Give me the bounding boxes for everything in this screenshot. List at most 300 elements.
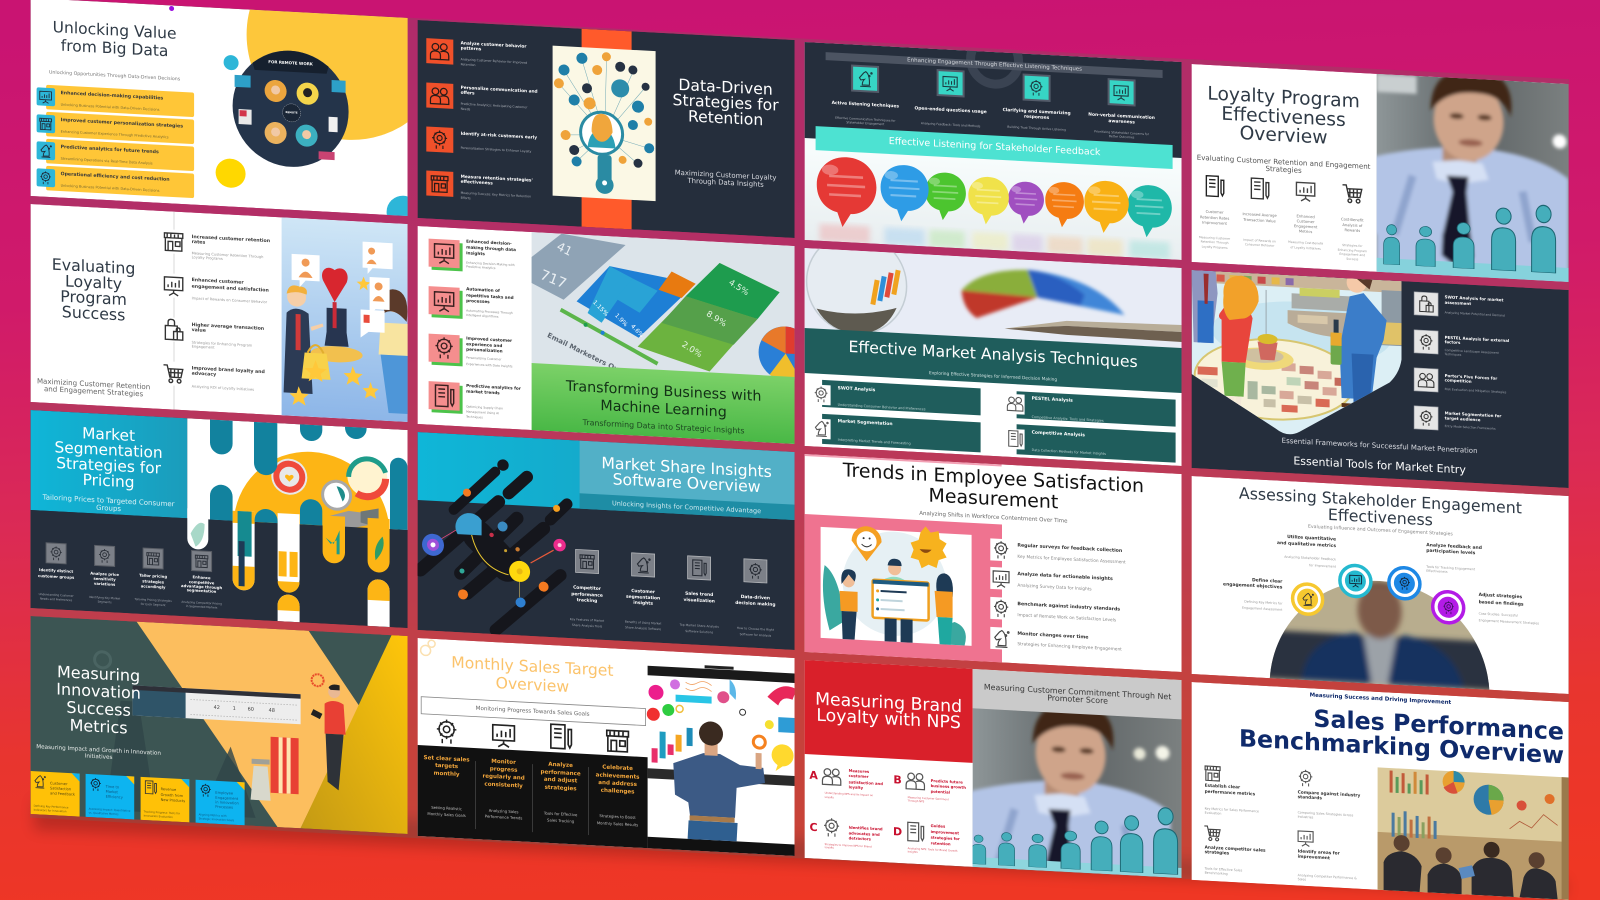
title: Unlocking Value xyxy=(53,18,177,43)
elephant-like yellow illustration xyxy=(31,410,408,628)
slide: Unlocking Value from Big Data xyxy=(30,0,408,216)
four software features: Share Analysis Software xyxy=(625,625,661,631)
A B C D benefits: strategies for xyxy=(931,834,960,841)
four metric cards: Processes xyxy=(215,805,233,810)
list of four capabilities xyxy=(37,84,194,198)
four engagement labels: Effectiveness xyxy=(1426,569,1448,574)
photo: team reviewing charts xyxy=(1378,767,1569,900)
four metric cards: Revenue xyxy=(161,787,177,792)
four survey practices: Analyze data for actionable insights xyxy=(1017,571,1113,582)
four pricing steps: for Each Segment xyxy=(141,602,166,607)
four technique bars: Competitive Analysis: Tools and Strategies xyxy=(1032,415,1104,423)
title: Strategies for xyxy=(673,91,779,115)
timeline of four outcomes: advocacy xyxy=(192,370,216,377)
grey subtitle band: Measuring Customer Commitment Through Net xyxy=(984,682,1171,701)
title: Segmentation xyxy=(54,438,163,462)
four ML benefits: Automation of xyxy=(466,286,500,293)
four pricing steps: accordingly xyxy=(141,583,166,589)
slide: Evaluating Loyalty Program Success xyxy=(31,204,409,422)
four benchmarking steps: Comparing Sales Strategies Across xyxy=(1298,810,1354,817)
four benchmarking steps: Analyzing Competitor Performance & xyxy=(1298,873,1357,880)
four survey practices: Benchmark against industry standards xyxy=(1017,601,1120,613)
A B C D benefits: Measuring Customer Sentiment xyxy=(908,795,949,801)
grey subtitle band xyxy=(973,669,1182,719)
four metrics: Metrics xyxy=(1299,229,1312,234)
four ML benefits: market trends xyxy=(466,388,500,395)
green title band: Transforming Business with xyxy=(565,379,761,405)
pink panel with team illustration xyxy=(805,514,1002,662)
A B C D benefits: business growth xyxy=(931,782,966,789)
four metric cards: Defining Key Performance xyxy=(34,804,69,810)
four ML benefits: Optimizing Supply Chain xyxy=(466,405,503,411)
four metrics: Improvement xyxy=(1202,221,1228,226)
four metrics: Increased Average xyxy=(1242,212,1277,218)
four market frameworks: Entry Mode Selection Frameworks xyxy=(1445,424,1496,431)
four ML benefits: Improved customer xyxy=(466,335,513,343)
four ML benefits: Predictive analytics for xyxy=(466,382,522,390)
four metric cards: Assessing Impact: Quantitative xyxy=(89,807,131,813)
four benchmarking steps: Analyze competitor sales xyxy=(1205,844,1266,853)
four retention steps: patterns xyxy=(461,45,482,52)
four listening techniques: Building Trust Through Active Listening xyxy=(1007,125,1066,132)
four benchmarking steps: Sales xyxy=(1298,877,1306,882)
slide: Effective Market Analysis Techniques xyxy=(805,231,1182,466)
black goals panel: monthly xyxy=(434,771,460,778)
four engagement labels: based on findings xyxy=(1479,599,1524,607)
subtitle: Maximizing Customer Loyalty xyxy=(675,169,776,182)
four engagement labels: and qualitative metrics xyxy=(1277,540,1336,549)
dashboard photo: 1.9% xyxy=(613,312,629,328)
four listening techniques: Analyzing Feedback: Tools and Methods xyxy=(921,121,981,128)
four market frameworks: SWOT Analysis for market xyxy=(1445,294,1503,302)
four metrics: Strategies for xyxy=(1342,243,1363,248)
pie chart and crystal ball photo xyxy=(804,248,1182,348)
four market frameworks: Competitive Landscape Assessment xyxy=(1445,348,1500,355)
four engagement labels: Engagement Measurement Strategies xyxy=(1479,618,1539,625)
four market frameworks: target audience xyxy=(1445,415,1481,422)
four listening techniques: awareness xyxy=(1108,118,1135,125)
four listening techniques: Prioritizing Stakeholder Concerns for xyxy=(1094,129,1150,136)
four metric cards: Strategic Innovation Goals xyxy=(199,816,235,822)
four benchmarking steps: improvement xyxy=(1298,853,1330,861)
title band xyxy=(805,328,1182,393)
four survey practices: Strategies for Enhancing Employee Engagement xyxy=(1017,641,1122,653)
soft shadow under collage xyxy=(34,800,1566,896)
photo: man with figures xyxy=(925,694,1182,878)
four retention steps xyxy=(426,38,538,204)
reflections xyxy=(820,224,1170,259)
slide: Trends in Employee Satisfaction Measurement xyxy=(805,454,1182,672)
four metrics: Success xyxy=(1346,257,1359,261)
four metric cards: Customer xyxy=(50,781,68,786)
subtitle: Initiatives xyxy=(85,754,113,761)
black goals panel: Tools for Effective xyxy=(543,810,578,817)
four metrics: Engagement xyxy=(1294,224,1318,229)
timeline of four outcomes: value xyxy=(192,327,206,333)
four pricing steps: customer groups xyxy=(38,572,75,579)
photo: man at whiteboard xyxy=(647,662,795,856)
black goals panel: progress xyxy=(490,766,518,774)
four pricing steps: strategies xyxy=(142,578,165,584)
four listening techniques xyxy=(832,64,1155,141)
timeline of four outcomes: Improved brand loyalty and xyxy=(192,365,265,375)
circular remote-work image xyxy=(233,48,349,170)
person with tablet xyxy=(311,674,346,791)
four pricing steps: Identify distinct xyxy=(39,567,73,573)
list of four capabilities: Streamlining Operations via Real-Time Data Analysis xyxy=(61,157,153,165)
four pricing steps: Analyze price xyxy=(90,570,119,577)
subtitle: Evaluating Influence and Outcomes of Engagement Strategies xyxy=(1308,524,1453,537)
four metrics xyxy=(1199,175,1367,262)
four software features: Data-driven xyxy=(741,593,770,601)
four ML benefits: personalization xyxy=(466,346,503,353)
four survey practices: Regular surveys for feedback collection xyxy=(1017,542,1122,554)
four metric cards: Efficiency xyxy=(106,795,124,800)
header band xyxy=(826,52,1163,78)
four ML benefits: Experiences with Data Insights xyxy=(466,362,513,368)
title box: Market Share Insights xyxy=(601,453,772,481)
four software features: Benefits of Using Market xyxy=(625,620,662,626)
green title band xyxy=(532,363,795,444)
four metric cards: Engagement xyxy=(215,796,239,801)
four software features: Top Market Share Analysis xyxy=(679,623,719,629)
title: Loyalty Program xyxy=(1207,83,1360,112)
slide: Sales Performance Benchmarking Overview xyxy=(1192,682,1569,900)
four retention steps: offers xyxy=(461,89,475,96)
logo rings xyxy=(421,640,435,656)
black goals panel: Monthly Sales Goals xyxy=(427,811,466,818)
dashboard photo: 717 xyxy=(538,267,568,292)
dashboard photo: 4.6% xyxy=(629,323,645,339)
black goals panel: Performance Trends xyxy=(485,813,522,820)
four metrics: Analysis of xyxy=(1342,223,1363,228)
four pricing steps: segmentation xyxy=(187,587,217,593)
dashboard photo: Email Marketers Ov xyxy=(546,331,620,374)
black goals panel: strategies xyxy=(545,785,577,792)
timeline of four outcomes xyxy=(162,229,270,393)
subtitle: Maximizing Customer Retention xyxy=(37,376,150,391)
four survey practices xyxy=(990,538,1126,656)
subtitle box xyxy=(421,697,646,726)
four metric cards: Employee xyxy=(215,791,234,796)
slide: Market Segmentation Strategies for Pricing xyxy=(31,410,408,628)
A B C D benefits: Measures xyxy=(849,767,870,774)
black goals panel: achievements xyxy=(596,772,640,781)
four software features: tracking xyxy=(577,597,597,604)
black goals panel: challenges xyxy=(601,788,635,796)
subtitle box: Monitoring Progress Towards Sales Goals xyxy=(476,706,590,718)
subtitle: Measuring Impact and Growth in Innovation xyxy=(36,744,161,757)
four metrics: Measuring Cost-Benefit xyxy=(1288,240,1324,246)
subtitle: Unlocking Insights for Competitive Advantage xyxy=(612,499,761,515)
four technique bars: PESTEL Analysis xyxy=(1032,396,1073,404)
four engagement labels: for Improvement xyxy=(1309,563,1337,569)
four survey practices: Monitor changes over time xyxy=(1017,631,1088,641)
four engagement labels: engagement objectives xyxy=(1223,581,1283,590)
four metrics: Cost-Benefit xyxy=(1341,217,1364,223)
four pricing steps: Tailoring Pricing Strategies xyxy=(134,597,172,603)
four software features: performance xyxy=(571,591,603,598)
four benchmarking steps: Identify areas for xyxy=(1298,848,1341,856)
four software features: Key Features of Market xyxy=(570,617,605,623)
slide: Data-Driven Strategies for Retention xyxy=(418,20,795,238)
network of dark pills xyxy=(420,455,567,634)
four software features: insights xyxy=(633,599,653,606)
title: Monthly Sales Target xyxy=(451,653,613,680)
title: Metrics xyxy=(70,715,128,737)
list of four capabilities: Enhanced decision-making capabilities xyxy=(61,90,163,102)
black goals panel: Monitor xyxy=(491,759,516,766)
four pricing steps: Enhance xyxy=(193,574,211,580)
four listening techniques: Effective Communication Techniques for xyxy=(835,116,896,123)
title: Overview xyxy=(1240,123,1328,148)
network illustration xyxy=(553,46,656,201)
circular remote-work image: REMOTE xyxy=(286,110,298,115)
four engagement labels: Analyzing Stakeholder Feedback xyxy=(1284,555,1336,561)
four ML benefits xyxy=(429,236,522,422)
black goals panel: targets xyxy=(435,763,459,770)
four ML benefits: Enhanced decision- xyxy=(466,238,512,246)
title: Pricing xyxy=(83,471,135,492)
A B C D benefits: D xyxy=(893,825,902,839)
four engagement labels: Adjust strategies xyxy=(1479,591,1523,600)
four market frameworks: competition xyxy=(1445,377,1472,383)
four listening techniques: Stakeholder Engagement xyxy=(846,120,885,126)
four market frameworks: Techniques xyxy=(1444,352,1462,357)
lower openings of illustration xyxy=(187,508,390,627)
four metric cards: Growth from xyxy=(161,793,184,798)
title: Essential Tools for Market Entry xyxy=(1293,454,1466,477)
four software features: decision making xyxy=(735,599,776,607)
four pricing steps xyxy=(38,542,222,610)
four market frameworks xyxy=(1414,292,1510,434)
four listening techniques: Open-ended questions usage xyxy=(914,105,987,115)
red title panel: Measuring Brand xyxy=(815,689,962,717)
four ML benefits: insights xyxy=(466,250,485,256)
four metric cards: Tracking Progress: Tools for xyxy=(143,809,181,815)
icons row xyxy=(437,718,628,754)
four engagement labels: Case Studies: Successful xyxy=(1479,612,1518,618)
timeline of four outcomes: Analyzing ROI of Loyalty Initiatives xyxy=(192,385,254,392)
title: Sales Performance xyxy=(1313,704,1564,746)
title box xyxy=(580,441,795,505)
four metrics: Consumer Behavior xyxy=(1245,242,1275,248)
title: Success xyxy=(66,697,131,720)
four ML benefits: Management Using AI xyxy=(466,410,499,415)
four listening techniques: Active listening techniques xyxy=(832,100,899,110)
kicker: Measuring Success and Driving Improvement xyxy=(1310,693,1452,706)
title: Program xyxy=(60,286,127,309)
circular remote-work image: FOR REMOTE WORK xyxy=(268,59,314,67)
black goals panel: Set clear sales xyxy=(424,755,470,764)
four ML benefits: processes xyxy=(466,297,490,304)
A B C D benefits: A xyxy=(809,769,818,782)
four retention steps: Measuring Success: Key Metrics for Retention xyxy=(461,191,531,199)
black goals panel: Strategies to Boost xyxy=(599,813,636,819)
colourful speech bubbles xyxy=(817,156,1172,244)
title: Overview xyxy=(496,674,569,696)
dashboard photo: 2.0% xyxy=(680,340,703,360)
slide: Transforming Business with Machine Learning xyxy=(418,226,813,445)
four ML benefits: Intelligent Algorithms xyxy=(466,313,499,319)
list of four capabilities: Unlocking Business Potential with Data-Driven Decisions xyxy=(61,103,160,112)
A B C D benefits: loyalty xyxy=(849,784,864,790)
A B C D benefits: C xyxy=(810,821,818,834)
four software features: Software Solutions xyxy=(685,629,714,634)
four retention steps: effectiveness xyxy=(461,178,493,186)
four metrics: Enhancing Program xyxy=(1338,248,1367,253)
four pricing steps: Tailor pricing xyxy=(139,572,167,579)
black goals panel: Analyze xyxy=(548,762,573,769)
black goals panel: and address xyxy=(598,780,638,788)
four benchmarking steps: standards xyxy=(1298,794,1322,801)
slide: Effective Listening for Stakeholder Feedback xyxy=(805,26,1182,260)
A B C D benefits: Insights xyxy=(908,849,918,854)
title: Data-Driven xyxy=(678,76,773,99)
four engagement labels: Analyze feedback and xyxy=(1426,542,1482,551)
four metrics: Retention Rates xyxy=(1200,215,1229,221)
title band: Exploring Effective Strategies for Informed Decision Making xyxy=(929,370,1057,383)
four pricing steps: Analyzing Competitor Pricing xyxy=(181,600,222,606)
four technique bars: Data Collection Methods for Market Insights xyxy=(1032,448,1106,456)
four metric cards: Aligning Metrics with xyxy=(199,812,227,818)
timeline of four outcomes: Loyalty Programs xyxy=(192,255,223,261)
timeline of four outcomes: engagement and satisfaction xyxy=(192,283,269,293)
timeline of four outcomes: Higher average transaction xyxy=(192,322,264,331)
A B C D benefits: Guides xyxy=(931,822,946,828)
four technique bars: Competitive Analysis xyxy=(1032,430,1085,438)
four ML benefits: making through data xyxy=(466,244,516,252)
title: from Big Data xyxy=(61,37,168,60)
A B C D benefits: Identifies brand xyxy=(849,824,883,831)
four retention steps: Measure retention strategies' xyxy=(461,173,533,183)
A B C D benefits: Analyzing NPS: Tools for Brand Growth xyxy=(908,846,958,852)
four benchmarking steps: Benchmarking xyxy=(1205,871,1228,876)
four technique bars: SWOT Analysis xyxy=(838,385,876,393)
subtitle: Analyzing Shifts in Workforce Contentment Over Time xyxy=(919,511,1068,525)
four software features xyxy=(570,549,776,638)
ruler graphic xyxy=(133,685,301,802)
four benchmarking steps: Evaluation xyxy=(1205,811,1221,816)
black goals panel: Celebrate xyxy=(602,764,633,772)
subtitle: Essential Frameworks for Successful Market Penetration xyxy=(1282,437,1478,455)
four technique bars xyxy=(811,379,1176,463)
four retention steps: Identify at-risk customers early xyxy=(461,131,537,141)
black goals panel: Analyzing Sales xyxy=(489,807,519,814)
A B C D benefits: satisfaction and xyxy=(849,779,883,786)
four survey practices: Key Metrics for Employee Satisfaction Assessment xyxy=(1017,554,1126,566)
subtitle: Through Data Insights xyxy=(686,177,764,189)
A B C D benefits: Through NPS xyxy=(908,798,925,803)
title: Strategies for xyxy=(56,454,162,478)
dashboard photo: 1.15% xyxy=(591,299,610,318)
dashboard photo: 8.9% xyxy=(704,309,728,329)
four technique bars: Market Segmentation xyxy=(838,418,893,427)
black goals panel: regularly and xyxy=(482,773,525,782)
four metrics: Measuring Customer xyxy=(1199,235,1231,241)
black goals panel: Monthly Sales Results xyxy=(597,820,638,827)
four software features: segmentation xyxy=(626,593,660,601)
four progress rings xyxy=(1293,562,1464,624)
slide: Loyalty Program Effectiveness Overview xyxy=(1192,54,1569,282)
A B C D benefits: Strategies to Improve NPS for Brand xyxy=(825,842,872,848)
subtitle: and Engagement Strategies xyxy=(44,384,144,398)
four benchmarking steps: Tools for Effective Sales xyxy=(1204,866,1243,873)
four market frameworks: Market Segmentation for xyxy=(1445,410,1501,418)
four listening techniques: responses xyxy=(1024,113,1050,120)
title: Evaluating xyxy=(52,254,135,278)
four software features: Sales trend xyxy=(685,590,713,598)
four software features: How to Choose the Right xyxy=(737,626,775,632)
timeline of four outcomes: rates xyxy=(192,239,205,245)
four engagement labels: Defining Key Metrics for xyxy=(1244,599,1283,606)
title: Market xyxy=(82,424,135,445)
four benchmarking steps: Compare against industry xyxy=(1298,789,1361,798)
title: Retention xyxy=(688,107,763,129)
four ML benefits: experience and xyxy=(466,341,502,348)
four market frameworks: Analyzing Market Potential and Demand xyxy=(1445,310,1505,318)
four metrics: Engagement and xyxy=(1339,252,1365,257)
A B C D benefits: retention xyxy=(931,840,951,846)
green title band: Transforming Data into Strategic Insights xyxy=(582,418,745,436)
photo: man with figures xyxy=(1376,74,1568,282)
red title panel xyxy=(805,660,973,763)
list of four capabilities: Enhancing Customer Experience Through Predictive Analytics xyxy=(61,130,169,139)
subtitle: Groups xyxy=(96,504,121,513)
list of four capabilities: Improved customer personalization strategies xyxy=(61,117,183,130)
four metrics: Retention Through xyxy=(1201,239,1229,245)
four market frameworks: factors xyxy=(1445,339,1461,345)
four market frameworks: Risk Evaluation and Mitigation Strategies xyxy=(1445,387,1507,394)
four metric cards: Satisfaction xyxy=(50,786,71,791)
four retention steps: Efforts xyxy=(461,196,471,200)
four software features: Software for Analysis xyxy=(740,632,772,638)
blurred circular photo xyxy=(1262,570,1502,690)
grey subtitle band: Promoter Score xyxy=(1047,693,1108,705)
four ML benefits: repetitive tasks and xyxy=(466,292,514,300)
title band: Effective Market Analysis Techniques xyxy=(848,337,1138,371)
four engagement labels: Tools for Tracking Engagement xyxy=(1425,565,1476,571)
A B C D benefits: B xyxy=(893,773,902,787)
title: Trends in Employee Satisfaction xyxy=(842,459,1144,497)
four pricing steps: advantage through xyxy=(181,582,222,590)
four ML benefits: Predictive Analytics xyxy=(466,265,496,270)
four ML benefits: Personalizing Customer xyxy=(466,356,502,361)
list of four capabilities: Unlocking Business Potential with Data-Driven Decisions xyxy=(61,184,160,193)
four metrics: Customer xyxy=(1206,210,1224,215)
four retention steps: Analyzing Customer Behavior for Improved xyxy=(461,57,527,65)
four retention steps: Retention xyxy=(461,62,476,67)
A B C D benefits: improvement xyxy=(931,828,959,835)
four software features: Customer xyxy=(631,588,656,595)
timeline of four outcomes: Measuring Customer Retention Through xyxy=(192,251,263,259)
four engagement labels: Utilize quantitative xyxy=(1287,533,1336,542)
dashboard photo xyxy=(532,232,813,384)
A B C D benefits: customer xyxy=(849,772,869,779)
black goals panel: performance xyxy=(540,769,581,777)
ruler graphic: 42 xyxy=(214,705,220,711)
A B C D benefits: advocates and xyxy=(849,830,880,836)
title: Measuring xyxy=(57,662,140,685)
four survey practices: Analyzing Survey Data for Insights xyxy=(1017,582,1092,592)
four technique bars: Interpreting Market Trends and Forecasting xyxy=(838,438,911,446)
teal banner title: Effective Listening for Stakeholder Feedback xyxy=(889,136,1101,158)
four pricing steps: Needs and Preferences xyxy=(40,597,73,602)
four metric cards: Market xyxy=(106,790,119,794)
four engagement labels xyxy=(1223,530,1539,625)
list of four capabilities: Predictive analytics for future trends xyxy=(61,144,159,155)
four metrics: Impact of Rewards on xyxy=(1243,238,1276,243)
